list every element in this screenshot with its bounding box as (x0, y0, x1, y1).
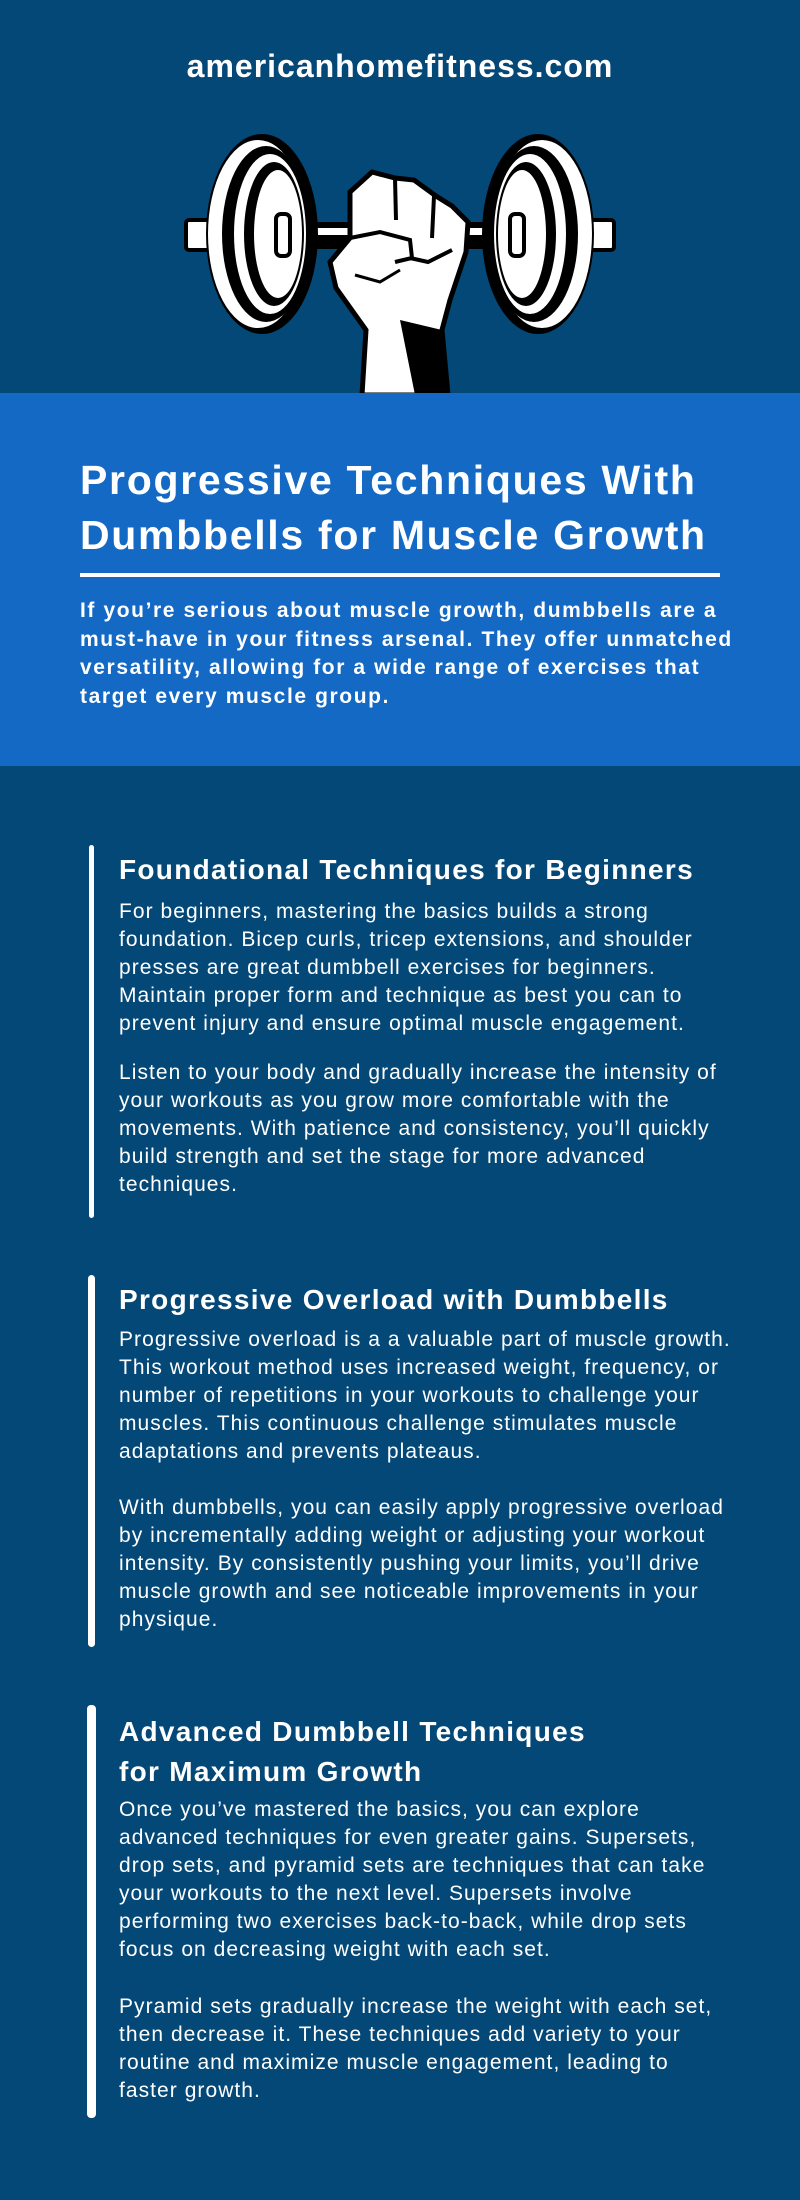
panel: foundational techniques (89, 845, 717, 1218)
body text: intensity. By consistently pushing your limits, you’ll drive (119, 1552, 700, 1575)
body text (119, 900, 717, 1196)
title: Dumbbells for Muscle Growth (80, 512, 707, 558)
body text: by incrementally adding weight or adjusting your workout (119, 1524, 705, 1547)
fist (330, 172, 468, 395)
title: Progressive Techniques With (80, 457, 697, 503)
body text: techniques. (119, 1173, 238, 1196)
body text: Maintain proper form and technique as best you can to (119, 984, 682, 1007)
body text: then decrease it. These techniques add variety to your (119, 2023, 681, 2046)
body text: physique. (119, 1608, 218, 1631)
body text: movements. With patience and consistency, you’ll quickly (119, 1117, 710, 1140)
intro text (80, 599, 733, 708)
body text: build strength and set the stage for more advanced (119, 1145, 645, 1168)
body text: performing two exercises back-to-back, while drop sets (119, 1910, 687, 1933)
body text: faster growth. (119, 2079, 261, 2102)
icon: fist holding dumbbell (184, 134, 616, 393)
body text: presses are great dumbbell exercises for beginners. (119, 956, 656, 979)
body text: routine and maximize muscle engagement, leading to (119, 2051, 669, 2074)
body text: muscles. This continuous challenge stimulates muscle (119, 1412, 677, 1435)
intro text: versatility, allowing for a wide range of exercises that (80, 656, 700, 679)
heading: Progressive Overload with Dumbbells (119, 1284, 669, 1315)
bar (186, 220, 614, 250)
intro text: target every muscle group. (80, 684, 390, 708)
body text: your workouts to the next level. Supersets involve (119, 1882, 633, 1905)
body text: Once you’ve mastered the basics, you can explore (119, 1798, 640, 1821)
body text (119, 1798, 712, 2102)
panel: progressive overload (88, 1275, 731, 1647)
body text: focus on decreasing weight with each set. (119, 1938, 551, 1961)
heading (119, 1716, 586, 1787)
body text: advanced techniques for even greater gains. Supersets, (119, 1826, 696, 1849)
body text: number of repetitions in your workouts to challenge your (119, 1384, 700, 1407)
intro text: must-have in your fitness arsenal. They offer unmatched (80, 628, 733, 650)
body text: prevent injury and ensure optimal muscle engagement. (119, 1012, 685, 1035)
heading: Advanced Dumbbell Techniques (119, 1716, 586, 1747)
accent bar (88, 1275, 95, 1647)
body text: your workouts as you grow more comfortable with the (119, 1089, 670, 1112)
body text: drop sets, and pyramid sets are techniques that can take (119, 1854, 705, 1877)
body text: Progressive overload is a a valuable part of muscle growth. (119, 1328, 731, 1351)
body text: foundation. Bicep curls, tricep extensions, and shoulder (119, 928, 693, 951)
body text: For beginners, mastering the basics builds a strong (119, 900, 649, 923)
heading: for Maximum Growth (119, 1756, 422, 1787)
right plate (482, 134, 594, 334)
accent bar (89, 845, 94, 1218)
body text (119, 1328, 731, 1631)
title (80, 457, 707, 558)
panel: title band (0, 393, 800, 766)
intro text: If you’re serious about muscle growth, dumbbells are a (80, 599, 717, 622)
body text: This workout method uses increased weight, frequency, or (119, 1356, 719, 1379)
accent bar (87, 1705, 96, 2118)
heading: Foundational Techniques for Beginners (119, 854, 694, 885)
body text: With dumbbells, you can easily apply progressive overload (119, 1496, 724, 1519)
body text: muscle growth and see noticeable improvements in your (119, 1580, 699, 1603)
body text: Listen to your body and gradually increase the intensity of (119, 1061, 717, 1084)
left plate (206, 134, 318, 334)
panel: advanced techniques (87, 1705, 712, 2118)
site url: americanhomefitness.com (187, 48, 613, 84)
body text: Pyramid sets gradually increase the weight with each set, (119, 1995, 712, 2018)
underline (80, 573, 720, 577)
body text: adaptations and prevents plateaus. (119, 1440, 482, 1463)
